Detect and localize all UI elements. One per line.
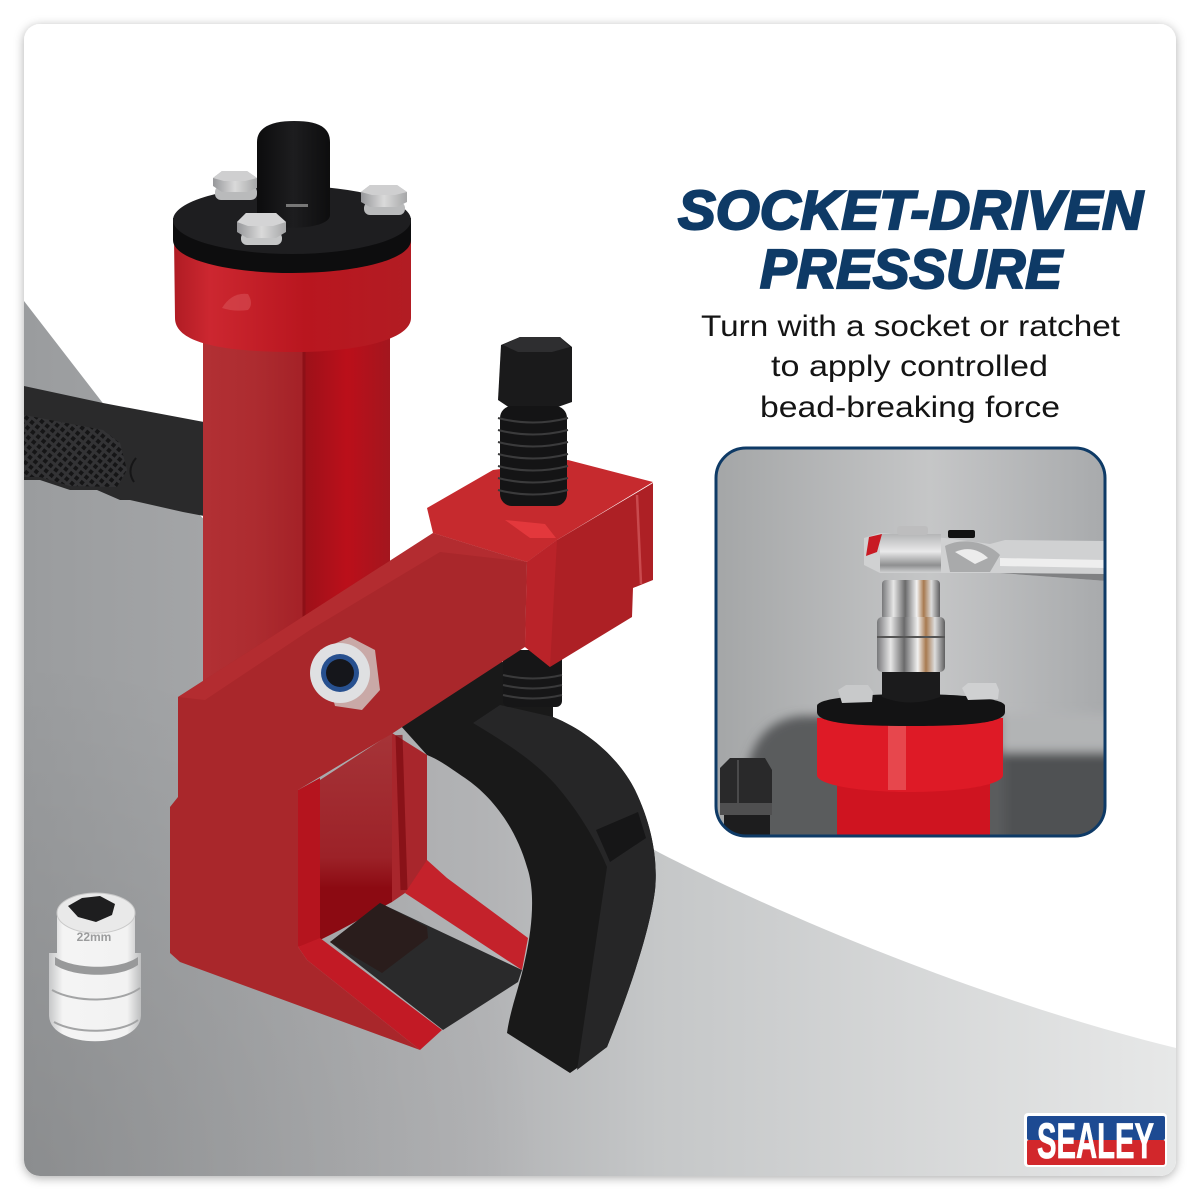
- background swoosh: [24, 301, 1176, 1176]
- body text: Turn with a socket or ratchet: [701, 310, 1121, 343]
- drive square: [882, 672, 940, 694]
- steel bolts: [213, 171, 407, 245]
- heading: PRESSURE: [760, 238, 1064, 300]
- red foot lips: [298, 860, 528, 1050]
- icon: product bead breaker tool: [24, 121, 656, 1073]
- red collar and column: [817, 694, 1005, 840]
- collar: [174, 238, 411, 352]
- ratchet handle: [864, 526, 1106, 581]
- tyre: [743, 714, 1115, 845]
- lower thread: [503, 650, 562, 707]
- chrome socket in use: [877, 580, 945, 672]
- heading: [678, 179, 1144, 300]
- icon: 22mm chrome socket: [49, 893, 141, 1041]
- handle: [24, 386, 204, 516]
- threaded bolt: [498, 337, 572, 506]
- black hook clamp: [400, 660, 656, 1073]
- panel: inset photo of ratchet on tool: [716, 448, 1115, 845]
- black disc: [173, 186, 411, 273]
- body text: [701, 310, 1121, 424]
- plate bolts: [838, 683, 999, 703]
- body text: bead-breaking force: [760, 391, 1060, 424]
- red cross arm and bracket: [170, 460, 653, 1050]
- heading: SOCKET-DRIVEN: [678, 179, 1144, 241]
- small bolt head: [720, 758, 772, 839]
- black foot pad: [330, 903, 522, 1030]
- column rear: [203, 335, 390, 705]
- icon: 22mm chrome socket: 22mm: [77, 930, 111, 944]
- lock nut: [310, 637, 380, 710]
- black drive shaft: [257, 121, 330, 228]
- body text: to apply controlled: [771, 350, 1048, 383]
- window interior: [298, 733, 427, 947]
